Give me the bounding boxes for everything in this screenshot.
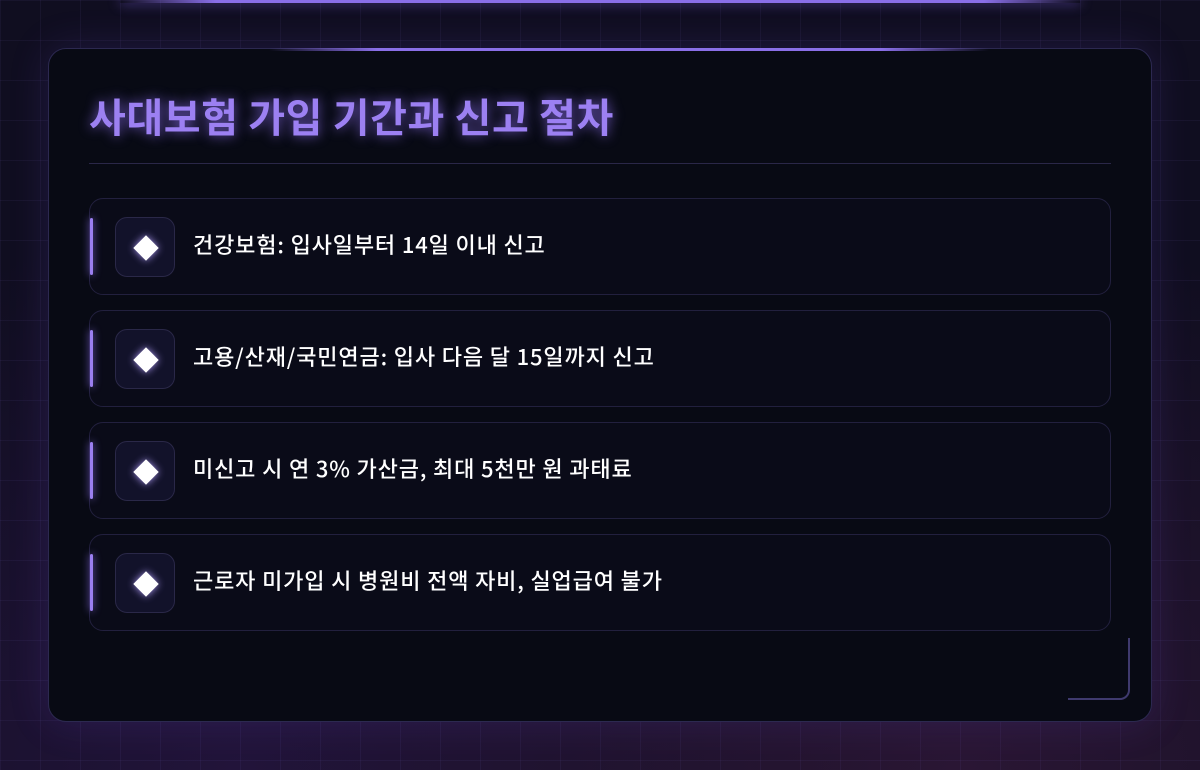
icon: diamond — [115, 329, 175, 389]
text: 고용/산재/국민연금: 입사 다음 달 15일까지 신고 — [193, 340, 655, 372]
icon: diamond — [115, 441, 175, 501]
item: worker disadvantage — [89, 534, 1111, 631]
icon: diamond — [115, 217, 175, 277]
item: penalty — [89, 422, 1111, 519]
item: health insurance — [89, 198, 1111, 295]
item: employment/pension — [89, 310, 1111, 407]
title: 사대보험 가입 기간과 신고 절차 — [89, 86, 614, 144]
icon: diamond — [115, 553, 175, 613]
text: 건강보험: 입사일부터 14일 이내 신고 — [193, 228, 546, 260]
text: 근로자 미가입 시 병원비 전액 자비, 실업급여 불가 — [193, 564, 663, 596]
text: 미신고 시 연 3% 가산금, 최대 5천만 원 과태료 — [193, 452, 633, 484]
